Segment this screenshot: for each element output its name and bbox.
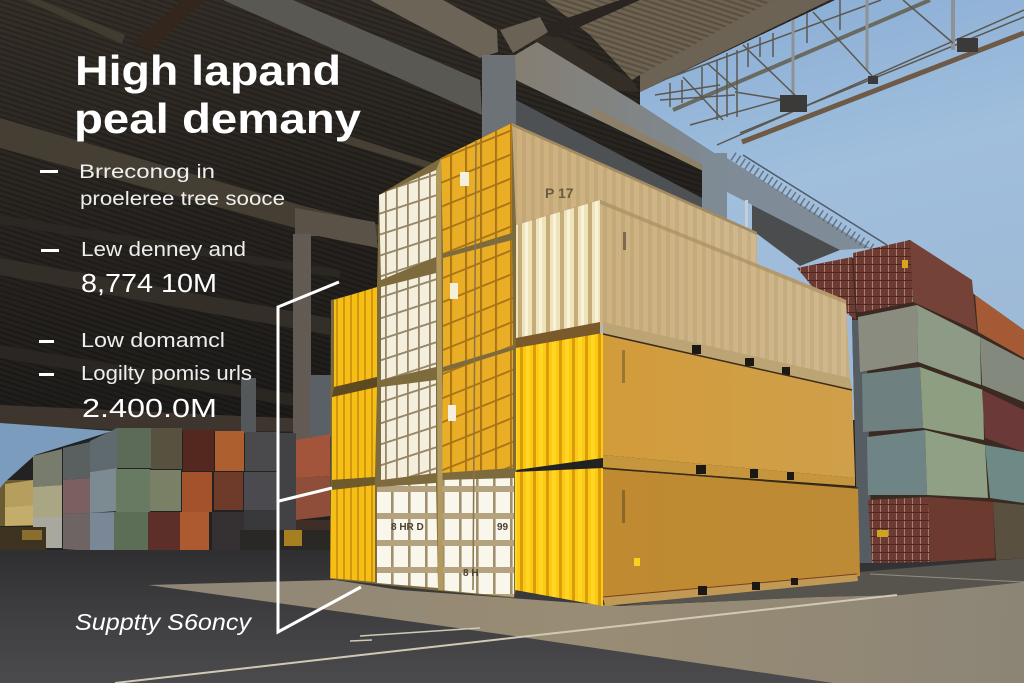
right container stack xyxy=(797,240,1024,563)
background: sky xyxy=(500,0,1024,420)
bullet: Lew denney: Lew denney and xyxy=(81,239,246,261)
caption: Supptty S6oncy xyxy=(75,609,253,635)
container doors: white column: 8 H xyxy=(463,568,479,579)
bullet: Logilty: 2.400.0M xyxy=(82,393,217,423)
container doors: white column: 99 xyxy=(497,522,509,533)
bullet: Brreconog: proeleree tree sooce xyxy=(80,189,285,210)
main steel girder xyxy=(515,42,887,266)
concrete columns xyxy=(241,55,516,444)
forklifts and machinery xyxy=(0,527,330,551)
title: peal demany xyxy=(74,95,362,142)
background: warehouse ceiling xyxy=(0,0,835,420)
title: High lapand xyxy=(75,47,341,94)
container stack backing frames xyxy=(330,123,518,598)
container: bottom yellow xyxy=(515,468,860,606)
floor xyxy=(0,550,1024,683)
container doors: white column: 8 HR D xyxy=(391,522,424,533)
container: top rear beige: P 17 xyxy=(545,185,574,201)
bullet: Low domamcl: Low domamcl xyxy=(81,330,225,352)
title xyxy=(74,47,362,142)
container: top rear beige xyxy=(512,123,757,265)
ceiling beams xyxy=(0,0,830,432)
floor lines xyxy=(115,574,1024,683)
callout bracket xyxy=(278,282,361,632)
bullet: Logilty: Logilty pomis urls xyxy=(81,363,252,385)
container doors: orange column xyxy=(440,123,514,597)
container doors: yellow left column xyxy=(330,287,377,582)
steel truss xyxy=(655,0,1024,145)
sky opening, lower left xyxy=(0,423,112,488)
container: middle yellow xyxy=(516,333,855,486)
back container wall xyxy=(0,428,330,553)
bullet: Low domamcl xyxy=(39,330,225,352)
container: top front beige xyxy=(516,200,852,390)
bullet: Lew denney: 8,774 10M xyxy=(81,268,217,298)
bullet: Lew denney xyxy=(41,239,246,298)
bullet: Brreconog xyxy=(40,162,285,210)
bullet: Logilty xyxy=(39,363,252,423)
container doors: white column xyxy=(377,158,509,590)
bullet: Brreconog: Brreconog in xyxy=(79,162,215,183)
